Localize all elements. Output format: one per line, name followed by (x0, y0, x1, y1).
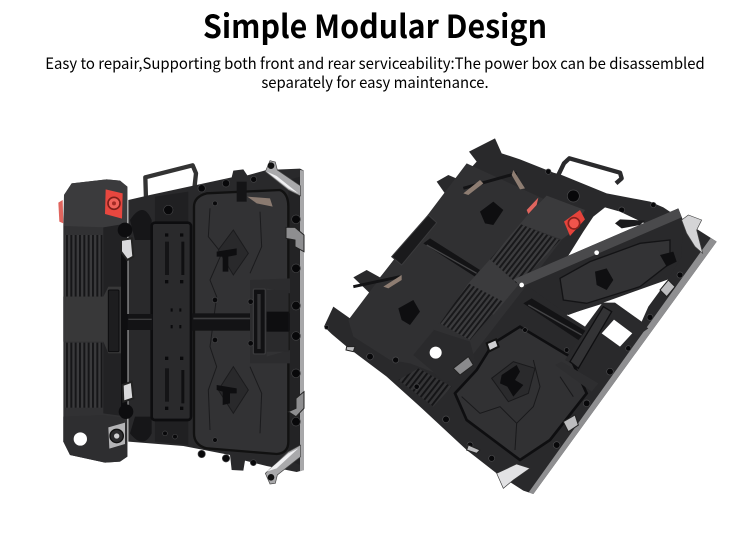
cross bar (127, 313, 290, 331)
paddle on frame (615, 219, 645, 228)
product: LED panel with opened rear door (324, 138, 717, 494)
white cutouts (567, 207, 678, 347)
mounting holes (163, 176, 300, 466)
dark side section upper (103, 223, 127, 297)
red power connector (564, 210, 585, 236)
top carry handle (145, 165, 196, 199)
box side grip (108, 290, 119, 352)
vertical spine (121, 240, 128, 413)
silver output connector (108, 423, 125, 449)
lower end cap (63, 415, 127, 463)
mounting holes (325, 169, 683, 461)
white vent circle (430, 347, 442, 359)
tilted cabinet frame (324, 138, 717, 494)
upper heat sink ribs (490, 224, 560, 285)
lower heat sink ribs (440, 283, 503, 340)
round knobs (118, 223, 132, 237)
corner brackets and side clamps (237, 161, 304, 484)
bent latches (383, 170, 525, 288)
product: LED panel rear view with power box (58, 161, 304, 484)
power box (58, 179, 133, 463)
lower end cap (413, 330, 475, 382)
red side latch (527, 198, 538, 214)
box middle section (63, 287, 127, 353)
description text: separately for easy maintenance. (261, 71, 489, 93)
white vent circle (74, 432, 87, 446)
dark side section lower (103, 342, 127, 417)
side clamps (346, 280, 675, 453)
rear handle (558, 158, 622, 183)
red side latch (58, 200, 63, 223)
cabinet frame (128, 169, 304, 472)
description text: Easy to repair,Supporting both front and rear serviceability:The power box can be disassembled (45, 52, 705, 74)
lower heat sink ribs (65, 343, 102, 408)
central channel (152, 223, 191, 420)
silver connector (453, 357, 473, 375)
opened rear door (513, 208, 683, 315)
center handle (250, 278, 290, 363)
upper heat sink ribs (65, 235, 102, 297)
red power connector (105, 189, 123, 219)
upper end cap (520, 196, 585, 239)
silver latches (121, 238, 133, 260)
inner handle (555, 303, 648, 392)
upper end cap (64, 179, 127, 227)
power box (413, 196, 585, 382)
white corner bracket (682, 215, 703, 253)
description text (45, 52, 705, 93)
box middle section (468, 259, 518, 315)
title: Simple Modular Design (203, 2, 547, 48)
bottom corner bracket (497, 464, 530, 488)
left handle on frame (392, 215, 437, 265)
cross bar (423, 238, 587, 340)
